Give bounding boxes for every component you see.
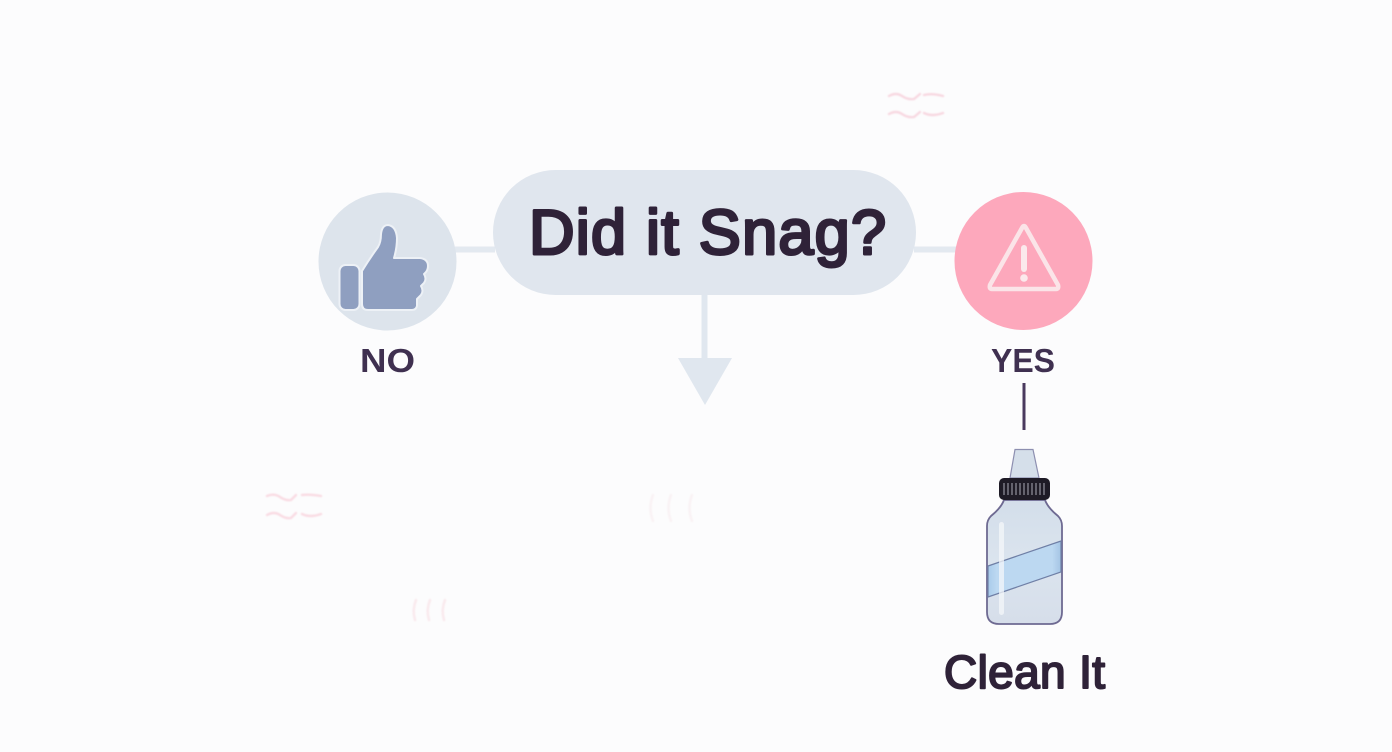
- no branch: [318, 192, 456, 379]
- icon: warning: [954, 192, 1092, 330]
- decorative steam lines: center: [650, 495, 692, 521]
- icon: cleaning bottle: [987, 450, 1062, 624]
- decorative steam lines: lower left: [414, 600, 445, 620]
- icon: thumbs up: [318, 192, 456, 330]
- heading: question: Did it Snag?: [529, 198, 886, 268]
- question pill: [493, 170, 916, 295]
- label: no: NO: [360, 342, 415, 379]
- decorative squiggle: top right: [889, 94, 943, 117]
- label: clean it: Clean It: [944, 646, 1105, 698]
- decorative squiggle: left: [267, 495, 321, 518]
- label: yes: YES: [991, 342, 1055, 379]
- clean it step: [944, 450, 1105, 698]
- connector: question to yes: [914, 246, 957, 252]
- connector: yes to bottle: [1022, 383, 1026, 430]
- arrow: down from question: [678, 293, 732, 405]
- yes branch: [954, 192, 1092, 379]
- connector: no to question: [455, 246, 495, 252]
